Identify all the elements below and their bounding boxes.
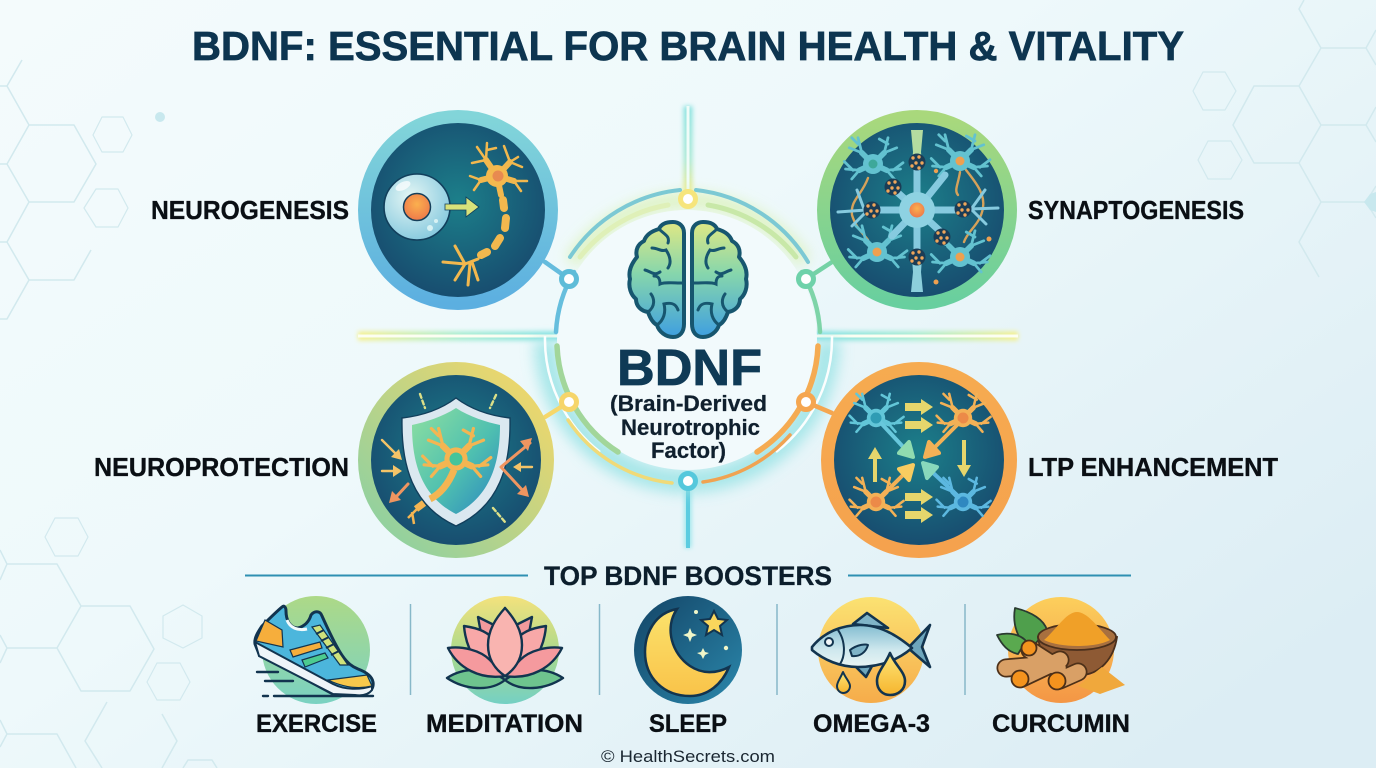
copyright: © HealthSecrets.com (601, 747, 775, 766)
central hub (545, 190, 832, 488)
badge circle (364, 116, 552, 304)
orange axons (852, 170, 983, 242)
bowl (1038, 624, 1117, 675)
new neuron (443, 143, 527, 285)
stripes (290, 642, 322, 657)
hub arcs (556, 190, 820, 483)
decorative dots (155, 112, 1376, 212)
icon: sleep moon (634, 596, 742, 704)
label: curcumin: CURCUMIN (992, 710, 1130, 738)
label: meditation: MEDITATION (426, 710, 583, 738)
icon: exercise shoe (255, 596, 373, 704)
leaves (447, 670, 563, 688)
label: neurogenesis: NEUROGENESIS (151, 195, 349, 225)
diagonal arrows (880, 422, 960, 498)
powder pile (1078, 667, 1125, 694)
back petals (478, 608, 532, 655)
gill, eye, pectoral (838, 630, 844, 664)
synapses (864, 154, 992, 284)
speed lines (257, 672, 373, 696)
center petal (488, 608, 522, 676)
sparkles (683, 610, 728, 659)
oil drops (877, 653, 905, 695)
protected neuron (408, 429, 491, 524)
powder mound (1044, 612, 1110, 646)
leaves (997, 608, 1047, 654)
stem cell (384, 174, 450, 240)
yellow arrows (868, 399, 971, 523)
fish body (812, 625, 912, 667)
hub subtitle: Neurotrophic (621, 415, 760, 440)
panel: neurogenesis (364, 116, 552, 304)
fins and tail (853, 613, 888, 628)
laces (312, 625, 348, 665)
hub disc (557, 210, 817, 470)
arrow (445, 197, 479, 217)
label: omega-3: OMEGA-3 (813, 710, 930, 738)
label: LTP enhancement: LTP ENHANCEMENT (1028, 452, 1278, 482)
threat arrows (382, 394, 532, 522)
cut ends (1012, 640, 1066, 690)
node: bottom (680, 474, 696, 488)
node: lower right (798, 394, 814, 410)
boosters heading: TOP BDNF BOOSTERS (544, 561, 832, 591)
badge circle (824, 116, 1010, 304)
panel: synaptogenesis (824, 116, 1010, 304)
hub subtitle: (Brain-Derived (610, 391, 767, 416)
node: upper right (798, 272, 814, 286)
hub subtitle: Factor) (651, 438, 726, 463)
icon: omega-3 fish (812, 597, 930, 703)
title: BDNF: ESSENTIAL FOR BRAIN HEALTH & VITALITY (192, 23, 1184, 69)
panel: LTP enhancement (828, 368, 1010, 552)
central neuron (838, 130, 998, 292)
icon: brain (629, 222, 747, 337)
panel: neuroprotection (364, 368, 548, 552)
turmeric roots (1006, 650, 1078, 680)
toe (328, 675, 372, 688)
sole (255, 642, 372, 695)
icon: curcumin (997, 597, 1125, 703)
node: upper left (562, 272, 576, 286)
neurons (850, 394, 991, 516)
label: synaptogenesis: SYNAPTOGENESIS (1028, 195, 1244, 225)
icon: meditation lotus (447, 596, 563, 704)
collar (287, 620, 307, 630)
hub title: BDNF (617, 339, 762, 396)
label: neuroprotection: NEUROPROTECTION (94, 452, 349, 482)
badge circle (828, 368, 1010, 552)
thin outer white rings (545, 336, 832, 452)
star (701, 611, 727, 635)
hub subtitle (610, 391, 767, 463)
small neurons (844, 135, 990, 272)
node: top (680, 192, 696, 206)
shoe body (255, 606, 373, 695)
booster dividers (410, 604, 965, 695)
label: sleep: SLEEP (649, 710, 727, 738)
middle petals (464, 626, 505, 676)
heel (256, 620, 283, 647)
badge circle (364, 368, 548, 552)
outer petals (448, 648, 505, 677)
connector lines (545, 262, 832, 417)
node: lower left (562, 394, 576, 410)
shield (402, 398, 510, 526)
glowing cross lines (358, 106, 1018, 548)
label: exercise: EXERCISE (256, 710, 377, 738)
glow around central hub (546, 200, 828, 481)
crescent (645, 609, 729, 696)
